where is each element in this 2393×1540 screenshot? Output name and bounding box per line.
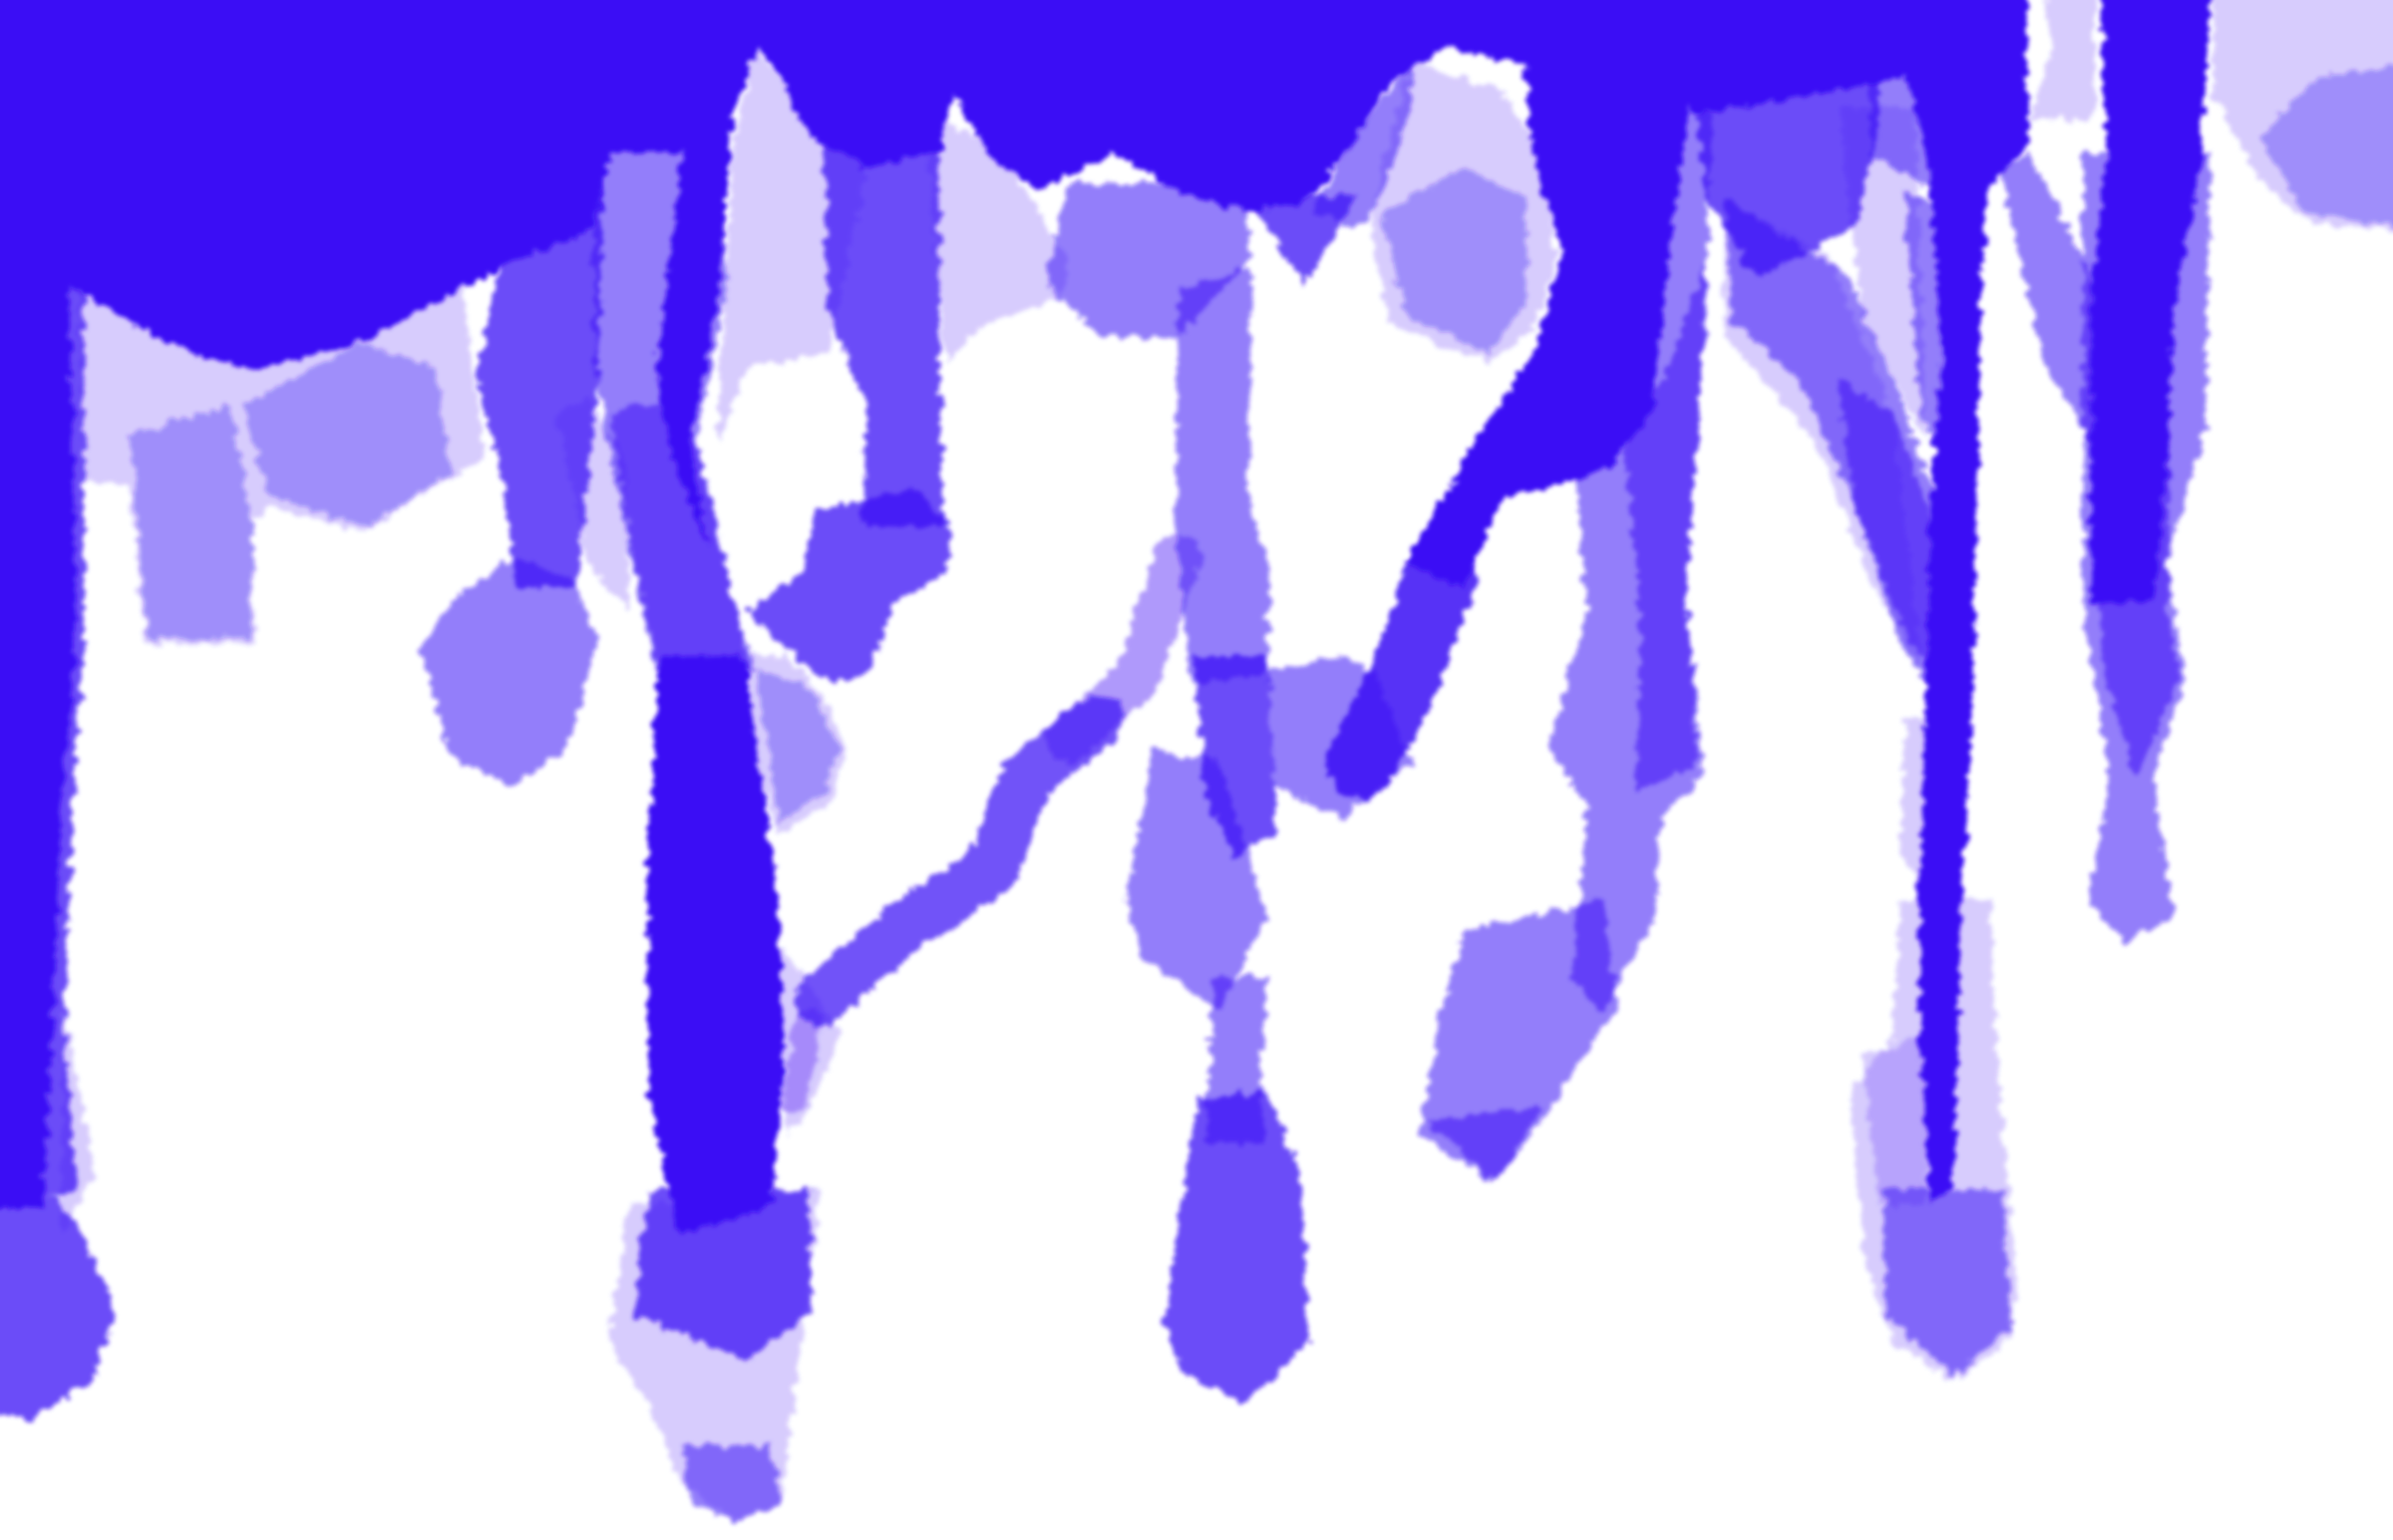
left foot	[0, 1198, 115, 1418]
thin drip	[1907, 0, 2030, 1202]
tall drip lower	[647, 656, 785, 1236]
right column	[1549, 259, 1706, 1015]
top mass	[0, 0, 2213, 371]
drip 795 block	[1045, 183, 1251, 339]
drip 342	[477, 167, 603, 587]
right drip dark	[2091, 0, 2213, 603]
block 1170	[1694, 69, 1880, 278]
central dark column	[1404, 61, 1694, 587]
dark paint layer	[0, 0, 2213, 1236]
branching drips	[1068, 557, 1179, 740]
tall centre drip lower	[633, 1190, 812, 1361]
tall centre drip upper	[592, 107, 756, 671]
left column dark	[0, 275, 77, 1213]
left column	[0, 275, 84, 1220]
tall drip top	[656, 122, 733, 549]
drip 580	[825, 138, 943, 526]
right drip	[2083, 153, 2210, 943]
curl	[1266, 656, 1412, 819]
